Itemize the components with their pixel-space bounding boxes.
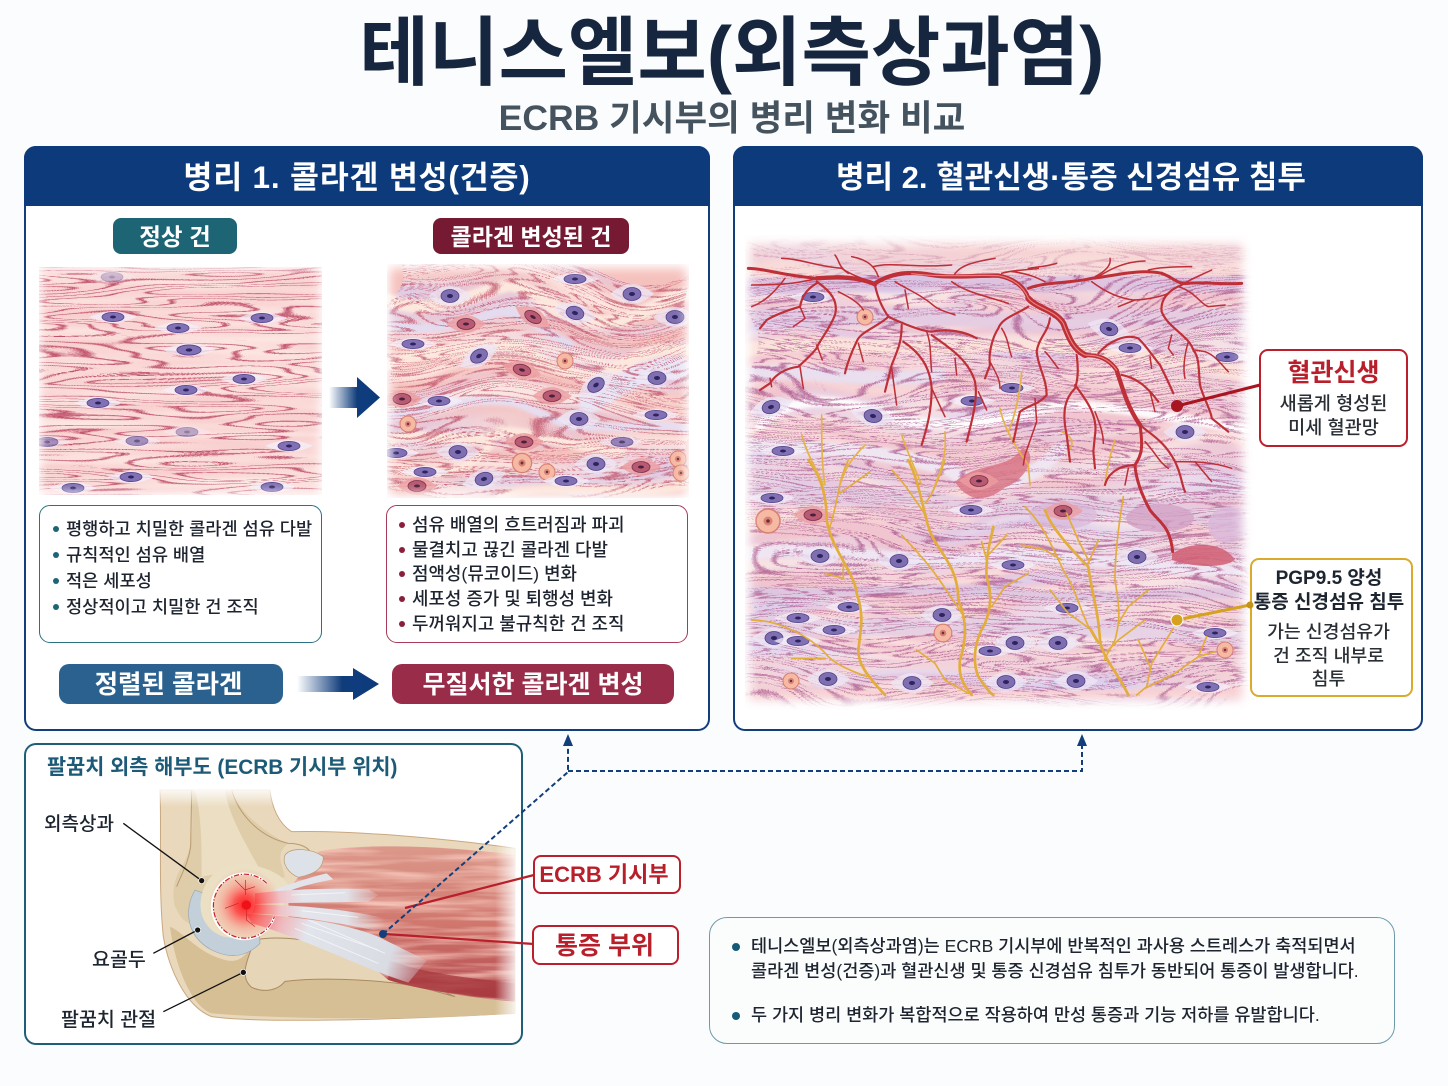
nerve fibers xyxy=(752,460,1215,695)
callout: PGP9.5 nerve fibers xyxy=(1250,558,1413,697)
bullet text 1: 콜라겐 변성(건증)과 혈관신생 및 통증 신경섬유 침투가 동반되어 통증이 발생합니다. xyxy=(751,961,1359,981)
label: aligned collagen: 정렬된 콜라겐 xyxy=(95,671,242,699)
item: 적은 세포성 xyxy=(66,571,152,591)
bullet text 1 xyxy=(732,936,1359,981)
dashed connector to panels xyxy=(383,745,1082,934)
panel heading xyxy=(24,146,710,206)
tissue background xyxy=(745,235,1255,710)
callout text xyxy=(1280,393,1387,438)
callout heading: 혈관신생 xyxy=(1287,359,1380,387)
label: ECRB origin xyxy=(533,855,681,894)
edge fades xyxy=(495,830,520,1030)
leader: pain site xyxy=(385,934,534,944)
muscle xyxy=(285,843,518,1003)
arrowheads and anchor xyxy=(379,734,1087,938)
bullet text 1: 테니스엘보(외측상과염)는 ECRB 기시부에 반복적인 과사용 스트레스가 축적되면서 xyxy=(751,936,1356,956)
panel heading: 팔꿈치 외측 해부도 (ECRB 기시부 위치) xyxy=(47,756,397,779)
callout heading xyxy=(1254,568,1404,612)
subtitle: ECRB 기시부의 병리 변화 비교 xyxy=(499,98,965,138)
common extensor stub xyxy=(284,850,323,877)
panel heading xyxy=(733,146,1423,206)
label: aligned collagen xyxy=(59,664,283,704)
callout text xyxy=(1267,621,1390,689)
lateral epicondyle xyxy=(200,864,290,938)
cartilage xyxy=(189,890,260,956)
callout: summary notes xyxy=(709,917,1395,1044)
illustration: elbow anatomy xyxy=(123,790,516,1021)
label: disordered collagen: 무질서한 콜라겐 변성 xyxy=(423,671,643,699)
item: 점액성(뮤코이드) 변화 xyxy=(412,564,577,584)
item: 규칙적인 섬유 배열 xyxy=(66,545,205,565)
tendons xyxy=(273,873,333,895)
title: 테니스엘보(외측상과염) xyxy=(360,11,1104,95)
item: 물결치고 끊긴 콜라겐 다발 xyxy=(412,540,608,560)
radius and ulna xyxy=(170,927,515,1018)
panel heading: 병리 1. 콜라겐 변성(건증) xyxy=(183,159,531,195)
label: degenerated tendon: 콜라겐 변성된 건 xyxy=(451,224,611,250)
label: normal tendon: 정상 건 xyxy=(139,224,211,250)
callout heading: PGP9.5 양성 xyxy=(1276,568,1382,589)
label: elbow joint: 팔꿈치 관절 xyxy=(61,1009,156,1031)
arrow: normal to degenerated xyxy=(330,377,380,418)
humerus xyxy=(173,790,288,923)
bullet text 2: 두 가지 병리 변화가 복합적으로 작용하여 만성 통증과 기능 저하를 유발합니다. xyxy=(751,1005,1320,1025)
leader: nerve fibers xyxy=(1171,602,1254,626)
text list: degenerated tendon xyxy=(386,505,688,643)
callout text: 건 조직 내부로 xyxy=(1273,644,1384,666)
illustration: normal tendon tissue xyxy=(39,267,322,495)
label: lateral epicondyle: 외측상과 xyxy=(44,814,114,835)
skin xyxy=(160,790,515,1020)
panel: elbow lateral anatomy xyxy=(24,743,523,1045)
callout text: 가는 신경섬유가 xyxy=(1267,621,1390,642)
illustration: neovascular tissue with nerves xyxy=(745,238,1250,708)
panel heading: 병리 2. 혈관신생·통증 신경섬유 침투 xyxy=(836,160,1306,195)
illustration: degenerated tendon tissue xyxy=(387,264,689,498)
item: 섬유 배열의 흐트러짐과 파괴 xyxy=(412,515,624,535)
pain hot spot xyxy=(208,868,282,942)
text list: normal tendon xyxy=(39,505,322,643)
label: radial head: 요골두 xyxy=(92,949,146,971)
item: 평행하고 치밀한 콜라겐 섬유 다발 xyxy=(66,519,312,539)
item: 두꺼워지고 불규칙한 건 조직 xyxy=(412,614,624,634)
panel: pathology 1 collagen degeneration xyxy=(24,146,710,731)
callout text: 침투 xyxy=(1312,668,1345,689)
upper nerve branches xyxy=(802,372,1115,485)
label: pain site xyxy=(532,925,679,965)
label: ECRB origin: ECRB 기시부 xyxy=(539,862,669,887)
callout: neovascularization xyxy=(1259,349,1408,447)
callout leaders xyxy=(123,823,246,1012)
label: degenerated tendon xyxy=(433,218,629,254)
label: normal tendon xyxy=(113,218,237,254)
label: pain site: 통증 부위 xyxy=(555,932,654,960)
callout heading: 통증 신경섬유 침투 xyxy=(1254,592,1404,612)
leader: ECRB origin xyxy=(405,875,534,908)
leader: neovascularization xyxy=(1171,385,1260,412)
label: disordered collagen xyxy=(392,664,674,704)
callout text: 미세 혈관망 xyxy=(1288,416,1379,438)
arrow: aligned to disordered xyxy=(298,668,379,700)
panel: pathology 2 neovascularization and nerve infiltration xyxy=(733,146,1423,731)
callout text: 새롭게 형성된 xyxy=(1280,393,1387,414)
item: 정상적이고 치밀한 건 조직 xyxy=(66,597,259,617)
item: 세포성 증가 및 퇴행성 변화 xyxy=(412,589,613,609)
blood vessels xyxy=(748,255,1242,552)
